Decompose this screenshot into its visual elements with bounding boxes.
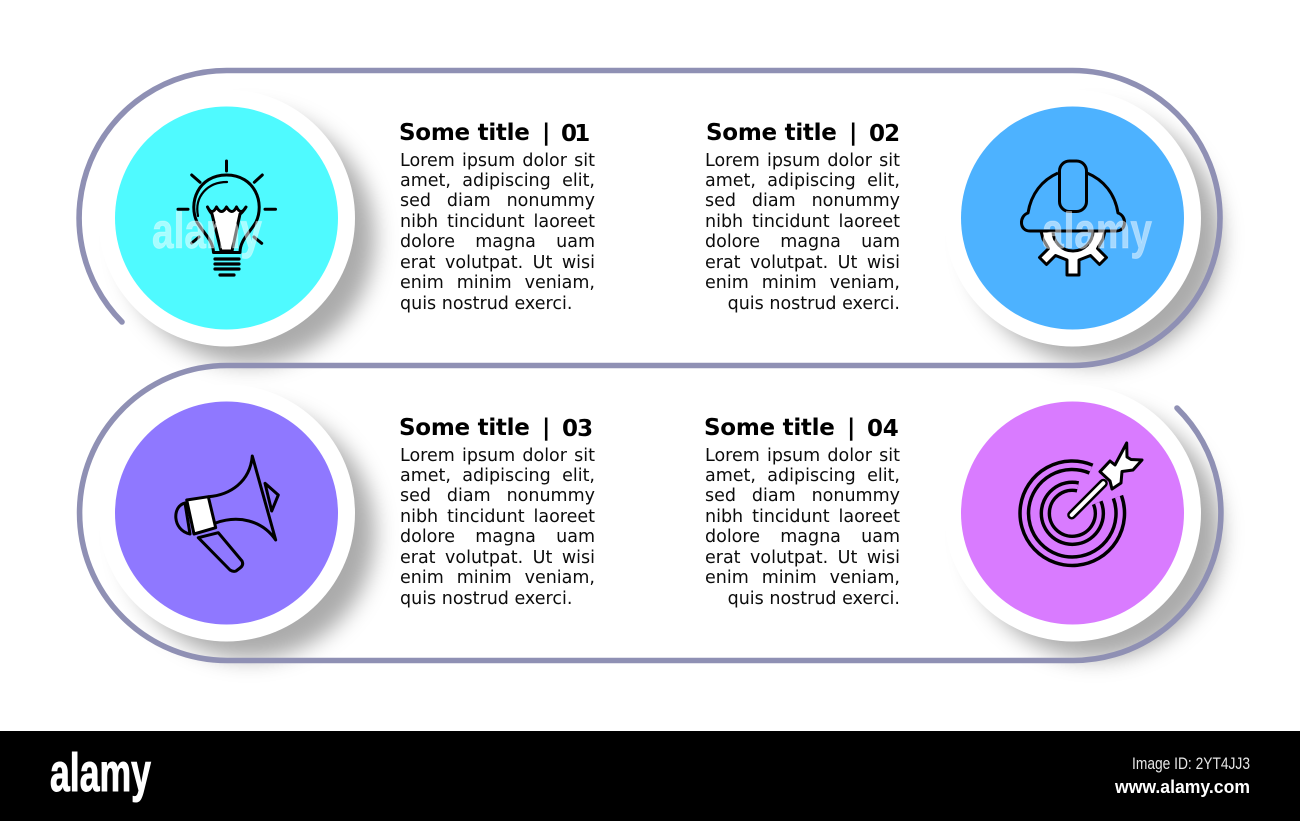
body 04: quis nostrud exerci. (728, 589, 900, 609)
body 03: erat volutpat. Ut wisi (400, 548, 595, 568)
title 04: | (847, 415, 855, 441)
body 04: erat volutpat. Ut wisi (705, 548, 900, 568)
text block 04 (704, 415, 900, 609)
watermark over circle 02: alamy (1042, 203, 1152, 259)
body 04: enim minim veniam, (705, 568, 900, 588)
footer band (0, 731, 1300, 821)
body 03: sed diam nonummy (400, 486, 595, 506)
connecting track line (79, 70, 1221, 661)
text block 03 (399, 415, 595, 609)
icon: target with arrow (1024, 443, 1142, 561)
body 01: dolore magna uam (400, 232, 595, 252)
body 03: Lorem ipsum dolor sit (400, 446, 595, 466)
body 04: amet, adipiscing elit, (705, 466, 900, 486)
body 01: sed diam nonummy (400, 191, 595, 211)
title 02: Some title (706, 120, 837, 146)
body 01: erat volutpat. Ut wisi (400, 253, 595, 273)
title 04: 04 (867, 416, 898, 442)
title 03 (399, 415, 592, 442)
body 01: nibh tincidunt laoreet (400, 212, 595, 232)
body 02: dolore magna uam (705, 232, 900, 252)
body 02: sed diam nonummy (705, 191, 900, 211)
circle drop shadows (123, 112, 1221, 659)
body 04: sed diam nonummy (705, 486, 900, 506)
footer url: www.alamy.com (1114, 777, 1250, 797)
body 03: enim minim veniam, (400, 568, 595, 588)
title 03: 03 (562, 416, 592, 442)
body 01: Lorem ipsum dolor sit (400, 150, 595, 170)
body 02: erat volutpat. Ut wisi (705, 253, 900, 273)
body 03: nibh tincidunt laoreet (400, 507, 595, 527)
title 04: Some title (704, 415, 835, 441)
body 04: nibh tincidunt laoreet (705, 507, 900, 527)
body 03: amet, adipiscing elit, (400, 466, 595, 486)
body 02: amet, adipiscing elit, (705, 171, 900, 191)
body 02: quis nostrud exerci. (728, 294, 900, 314)
title 02 (706, 120, 899, 147)
title 03: Some title (399, 415, 530, 441)
watermark over circle 01: alamy (152, 203, 262, 259)
body 04: Lorem ipsum dolor sit (705, 446, 900, 466)
body 01: amet, adipiscing elit, (400, 171, 595, 191)
body 02: nibh tincidunt laoreet (705, 212, 900, 232)
coloured circle 01 (115, 106, 338, 330)
text block 02 (705, 120, 900, 314)
icon: megaphone (176, 456, 278, 571)
footer image id: Image ID: 2YT4JJ3 (1132, 754, 1250, 773)
coloured circle 02 (961, 106, 1184, 330)
body 01 (400, 150, 595, 314)
title 04 (704, 415, 898, 442)
title 02: 02 (869, 121, 899, 147)
body 02: Lorem ipsum dolor sit (705, 150, 900, 170)
coloured circle 04 (961, 402, 1184, 624)
title 01: 01 (561, 121, 587, 147)
body 04: dolore magna uam (705, 527, 900, 547)
coloured circle 03 (115, 402, 338, 624)
white circle plates (98, 90, 1201, 642)
title 01: Some title (399, 120, 530, 146)
icon: helmet with gear (1021, 161, 1125, 275)
title 02: | (849, 120, 857, 146)
title 01: | (542, 120, 550, 146)
footer logo: alamy (50, 743, 151, 803)
body 01: quis nostrud exerci. (400, 294, 572, 314)
body 03: quis nostrud exerci. (400, 589, 572, 609)
body 01: enim minim veniam, (400, 273, 595, 293)
body 02 (705, 150, 900, 314)
body 04 (705, 446, 900, 609)
icon: light bulb (178, 161, 276, 275)
body 03 (400, 446, 595, 609)
title 01 (399, 120, 589, 147)
text block 01 (399, 120, 595, 314)
title 03: | (542, 415, 550, 441)
body 03: dolore magna uam (400, 527, 595, 547)
body 02: enim minim veniam, (705, 273, 900, 293)
